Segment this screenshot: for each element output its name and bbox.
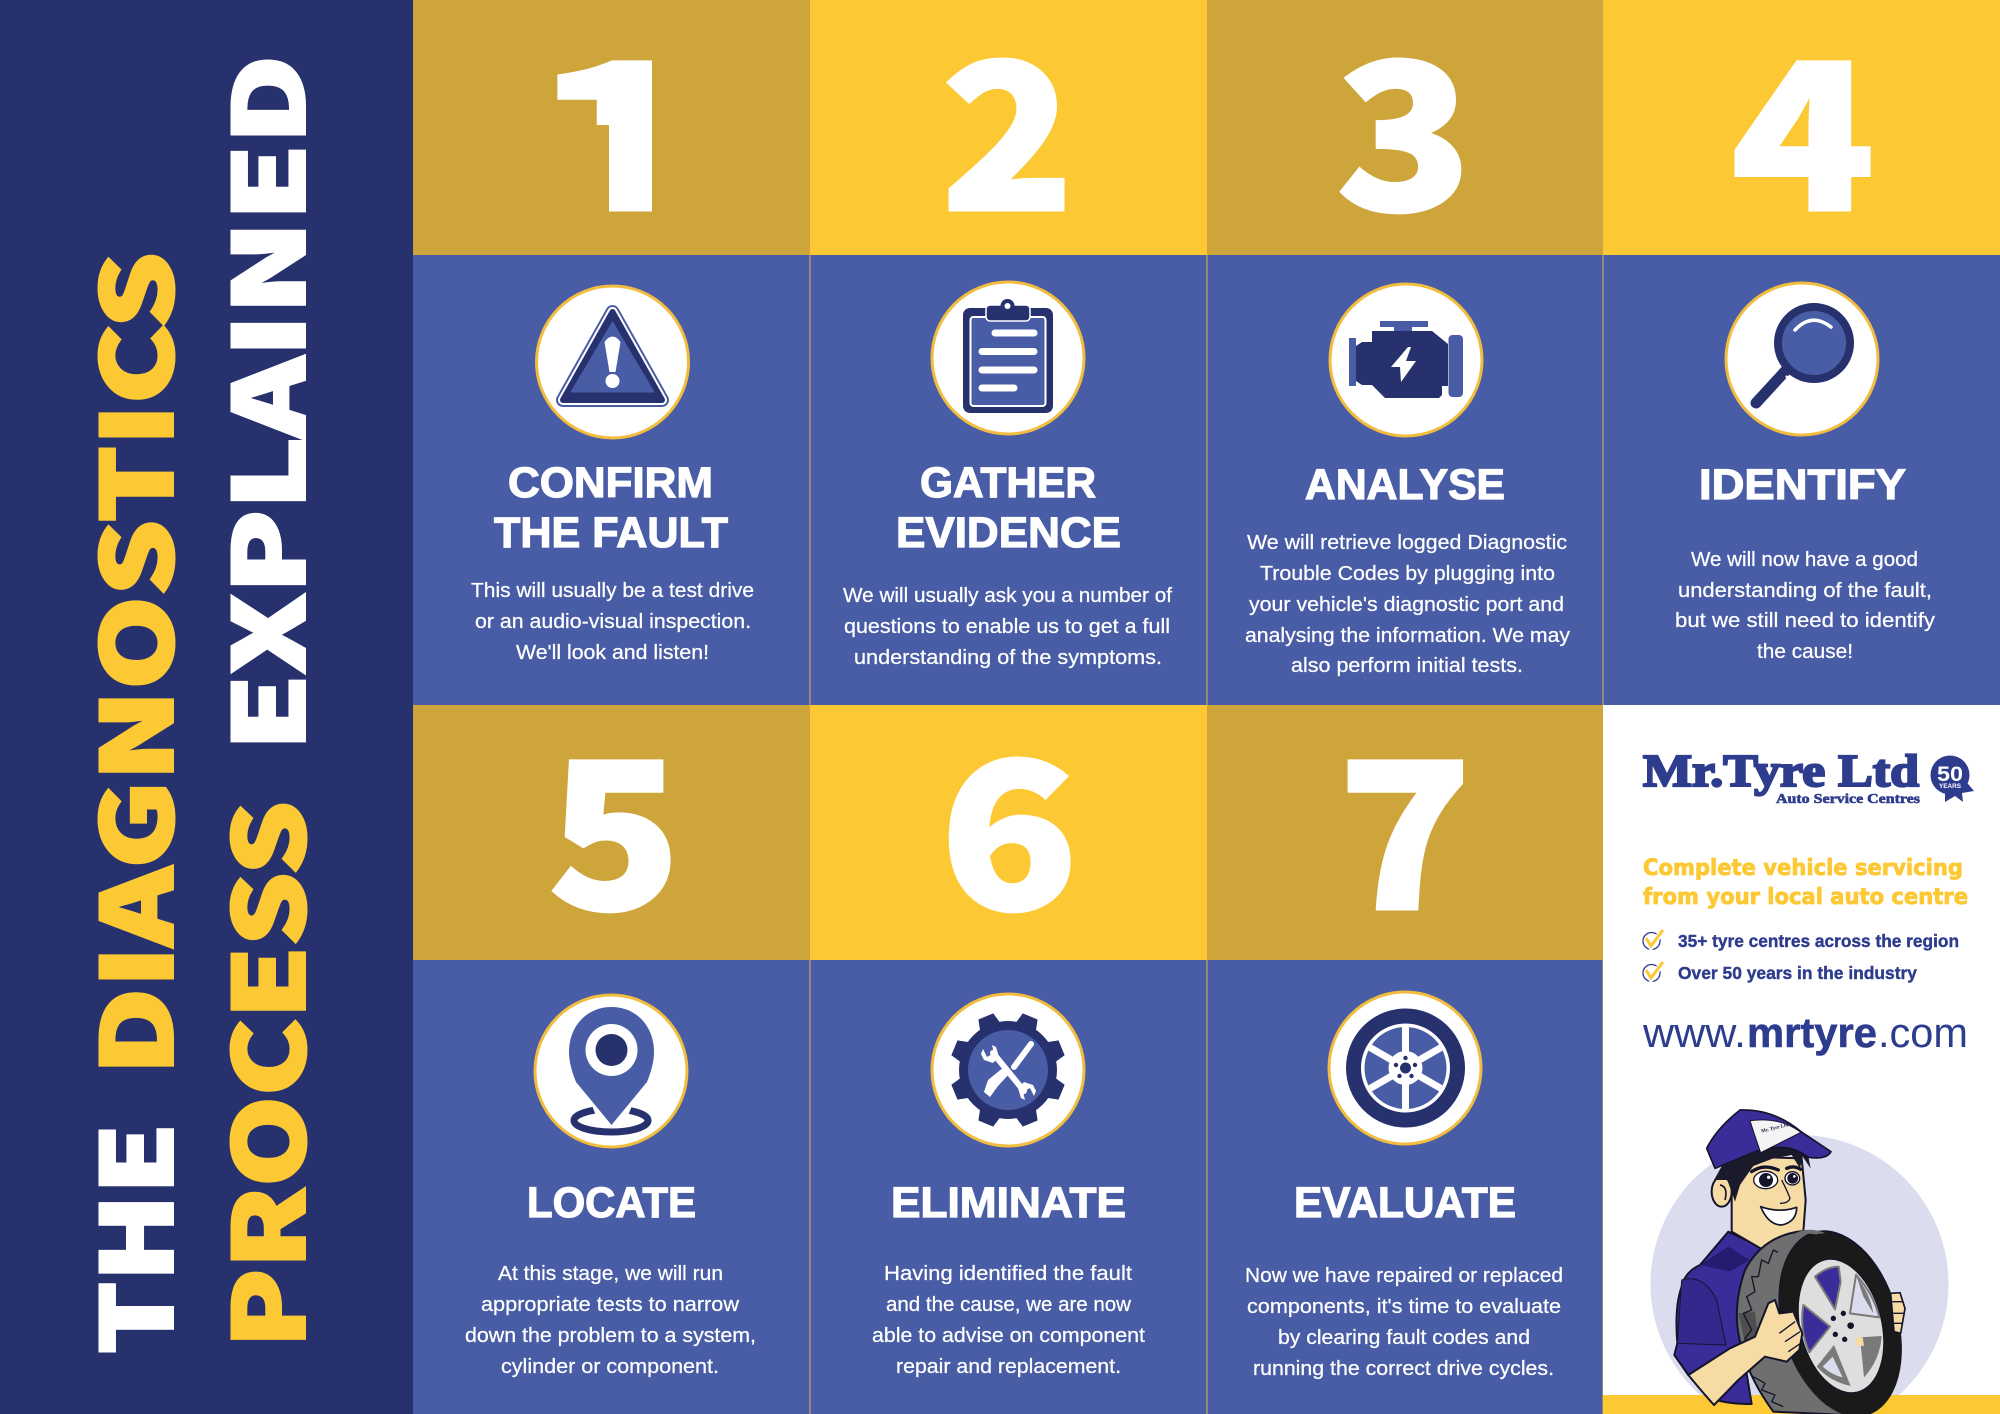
tagline: from your local auto centre	[1643, 885, 1968, 910]
panel: step 6 eliminate	[810, 672, 1207, 1414]
body text: Having identified the fault	[884, 1262, 1132, 1285]
right hand	[1891, 1293, 1905, 1333]
panel: step 7 evaluate	[1207, 672, 1603, 1414]
tagline	[1643, 856, 1968, 910]
number 6: 6	[940, 672, 1078, 968]
body text: running the correct drive cycles.	[1253, 1357, 1554, 1380]
body text	[872, 1262, 1145, 1378]
body text	[843, 584, 1172, 669]
heading: IDENTIFY	[1699, 462, 1906, 509]
tagline: Complete vehicle servicing	[1643, 856, 1963, 881]
body text: understanding of the fault,	[1678, 579, 1932, 602]
logo: Mr.Tyre Ltd: Mr.Tyre Ltd	[1643, 745, 1919, 796]
website address: .com	[1878, 1009, 1968, 1056]
panel: step 5 locate	[413, 672, 810, 1414]
body text: analysing the information. We may	[1245, 624, 1571, 647]
body text: questions to enable us to get a full	[844, 615, 1170, 638]
icon: magnifying glass	[1726, 283, 1878, 435]
heading: ELIMINATE	[891, 1180, 1126, 1227]
body text: understanding of the symptoms.	[854, 646, 1162, 669]
panel: step 1 confirm the fault	[413, 0, 810, 705]
icon: 50 years rosette badge: 50	[1937, 763, 1963, 786]
icon: clipboard	[932, 282, 1084, 434]
number 7: 7	[1338, 672, 1472, 968]
body text: repair and replacement.	[896, 1355, 1121, 1378]
body text: We will retrieve logged Diagnostic	[1247, 531, 1567, 554]
heading	[494, 460, 728, 557]
heading: LOCATE	[527, 1180, 696, 1227]
title: The Diagnostics Process Explained	[60, 55, 332, 1354]
cap	[1707, 1110, 1831, 1168]
body text: We will usually ask you a number of	[843, 584, 1172, 607]
body text: components, it's time to evaluate	[1247, 1295, 1561, 1318]
website address: mrtyre	[1747, 1009, 1877, 1056]
heading: CONFIRM	[508, 460, 713, 507]
body text	[1675, 548, 1936, 663]
tyre tread	[1737, 1231, 1873, 1414]
body text: Trouble Codes by plugging into	[1260, 562, 1555, 585]
heading: EVIDENCE	[896, 510, 1121, 557]
icon: check 2	[1643, 962, 1663, 982]
body text	[1245, 1264, 1563, 1380]
title: The Diagnostics Process Explained: PROCESS	[192, 801, 332, 1348]
body text: by clearing fault codes and	[1278, 1326, 1530, 1349]
body text: Now we have repaired or replaced	[1245, 1264, 1563, 1287]
body text: and the cause, we are now	[886, 1293, 1131, 1316]
icon: 50 years rosette badge: YEARS	[1939, 783, 1962, 790]
panel: title sidebar	[0, 0, 413, 1414]
website address	[1642, 1009, 1968, 1056]
body text: appropriate tests to narrow	[481, 1293, 739, 1316]
number 5: 5	[548, 672, 681, 968]
heading: EVALUATE	[1294, 1180, 1516, 1227]
panel: step 4 identify	[1603, 0, 2000, 705]
panel: Mr Tyre company information	[1603, 705, 2000, 1414]
illustration: mascot holding a tyre	[1674, 1110, 1922, 1414]
wheel rim	[1785, 1250, 1897, 1402]
icon: 50 years rosette badge	[1930, 756, 1974, 802]
icon: wheel	[1329, 992, 1481, 1144]
title: The Diagnostics Process Explained: EXPLAINED	[192, 55, 332, 751]
body text: the cause!	[1757, 640, 1853, 663]
smile	[1761, 1207, 1797, 1225]
body text: your vehicle's diagnostic port and	[1249, 593, 1564, 616]
shirt	[1674, 1232, 1763, 1404]
icon: engine	[1330, 284, 1482, 436]
panel: step 2 gather evidence	[810, 0, 1207, 705]
body text	[471, 579, 754, 664]
body text: or an audio-visual inspection.	[475, 610, 751, 633]
eyes	[1754, 1171, 1778, 1189]
tyre front	[1759, 1217, 1921, 1414]
panel: step 3 analyse	[1207, 0, 1603, 705]
checklist	[1643, 930, 1959, 983]
body text: At this stage, we will run	[498, 1262, 723, 1285]
body text: but we still need to identify	[1675, 609, 1936, 632]
body text: down the problem to a system,	[465, 1324, 756, 1347]
logo: Mr.Tyre Ltd	[1643, 745, 1974, 807]
illustration: mascot holding a tyre: Mr. Tyre Ltd	[1761, 1123, 1789, 1135]
heading: ANALYSE	[1305, 462, 1505, 509]
footer strip	[1603, 1395, 2000, 1414]
heading: THE FAULT	[494, 510, 728, 557]
icon: check 1	[1643, 930, 1663, 950]
heading: GATHER	[920, 460, 1096, 507]
body text: cylinder or component.	[501, 1355, 719, 1378]
hair	[1714, 1140, 1811, 1202]
body text: We'll look and listen!	[516, 641, 709, 664]
body text: also perform initial tests.	[1291, 654, 1523, 677]
body text: We will now have a good	[1691, 548, 1918, 571]
checklist: 35+ tyre centres across the region	[1678, 931, 1959, 951]
icon: location pin	[535, 995, 687, 1147]
checklist: Over 50 years in the industry	[1678, 963, 1917, 983]
body text: This will usually be a test drive	[471, 579, 754, 602]
neck and face	[1732, 1157, 1806, 1249]
title: The Diagnostics Process Explained: DIAGNOSTICS	[60, 252, 200, 1075]
body text	[465, 1262, 756, 1378]
heading	[896, 460, 1121, 557]
left hand	[1688, 1300, 1802, 1405]
body text	[1245, 531, 1571, 677]
lavender circle	[1650, 1135, 1948, 1414]
body text: able to advise on component	[872, 1324, 1145, 1347]
icon: gear with tools	[932, 994, 1084, 1146]
website address: www.	[1642, 1009, 1746, 1056]
icon: warning triangle	[536, 286, 688, 438]
title: The Diagnostics Process Explained: THE	[60, 1123, 200, 1354]
logo: Mr.Tyre Ltd: Auto Service Centres	[1776, 792, 1921, 807]
